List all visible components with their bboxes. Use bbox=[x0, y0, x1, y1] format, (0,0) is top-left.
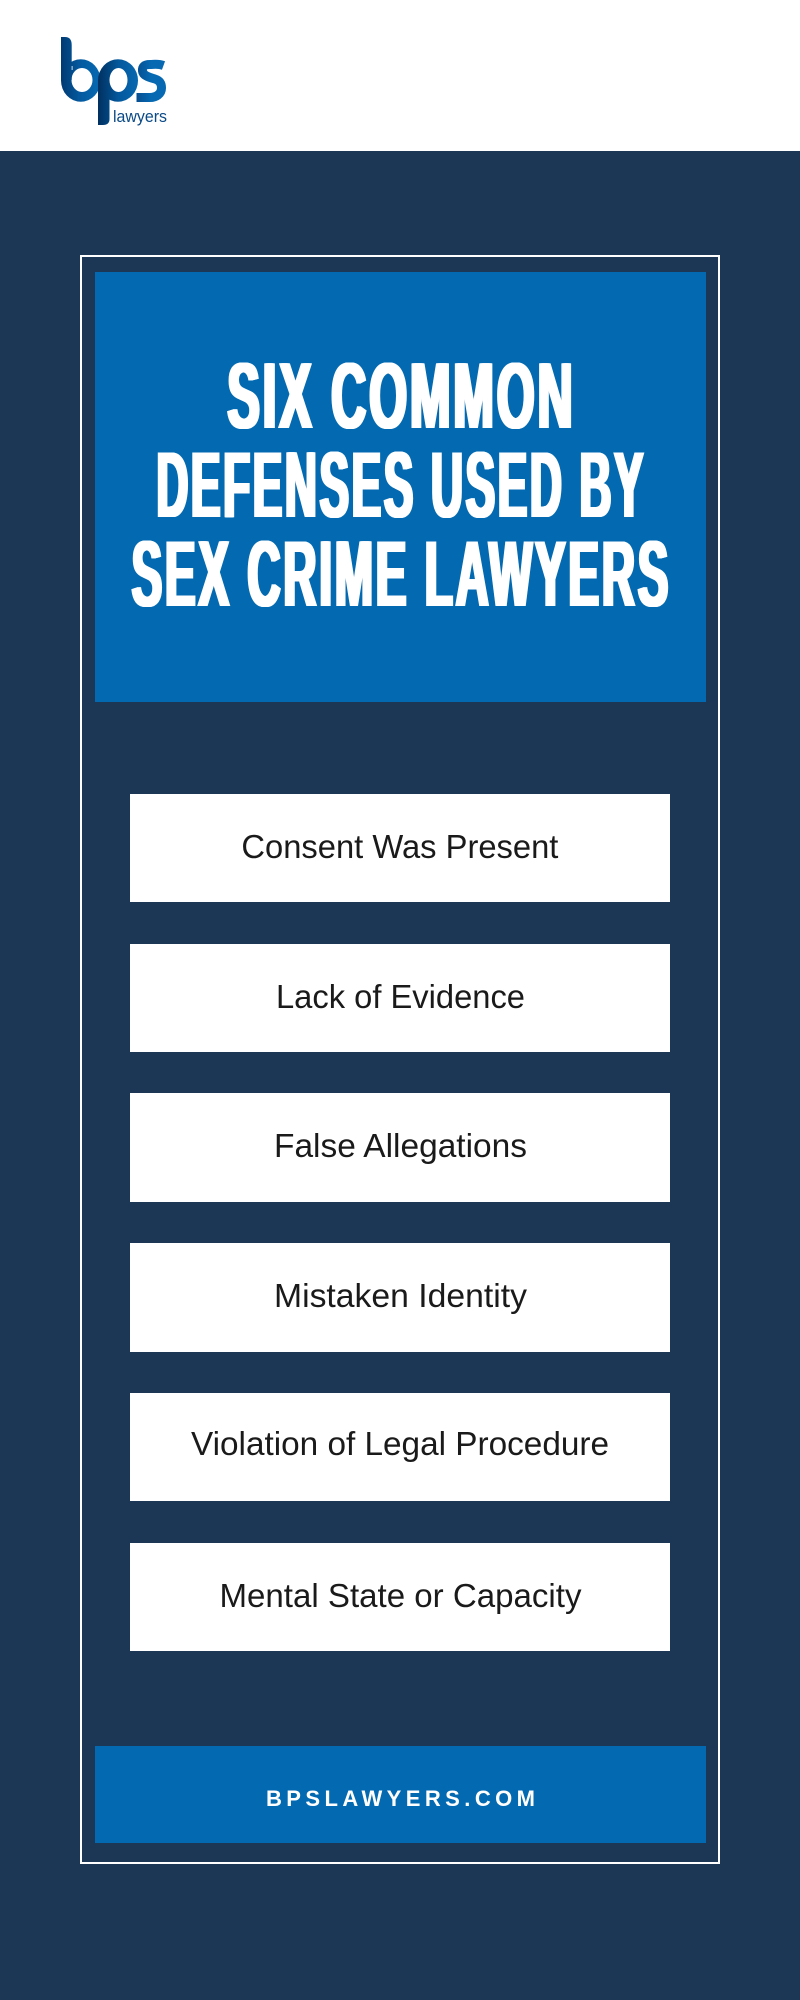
item: Mental State or Capacity bbox=[130, 1543, 670, 1651]
title: SIX COMMON bbox=[227, 343, 576, 448]
item: Mental State or Capacity: Mental State or Capacity bbox=[220, 1577, 582, 1614]
title panel bbox=[94, 272, 706, 702]
item: Violation of Legal Procedure: Violation of Legal Procedure bbox=[191, 1425, 609, 1462]
footer panel bbox=[94, 1746, 706, 1843]
item: Mistaken Identity: Mistaken Identity bbox=[274, 1277, 527, 1314]
title bbox=[131, 343, 671, 626]
item: False Allegations: False Allegations bbox=[274, 1127, 527, 1164]
item: Lack of Evidence: Lack of Evidence bbox=[276, 978, 525, 1014]
icon: bps lawyers logo bbox=[61, 37, 167, 126]
title: SEX CRIME LAWYERS bbox=[132, 521, 671, 626]
outer white frame bbox=[80, 255, 720, 1864]
item: False Allegations bbox=[130, 1093, 670, 1202]
item: Consent Was Present: Consent Was Present bbox=[241, 828, 558, 864]
item: Mistaken Identity bbox=[130, 1243, 670, 1352]
item: Lack of Evidence bbox=[130, 944, 670, 1052]
item: Consent Was Present bbox=[130, 794, 670, 902]
title: DEFENSES USED BY bbox=[156, 432, 646, 537]
footer url text: BPSLAWYERS.COM bbox=[266, 1786, 534, 1811]
icon: bps lawyers logo: lawyers bbox=[113, 107, 167, 126]
item: Violation of Legal Procedure bbox=[130, 1393, 670, 1501]
header band with logo bbox=[0, 0, 800, 151]
